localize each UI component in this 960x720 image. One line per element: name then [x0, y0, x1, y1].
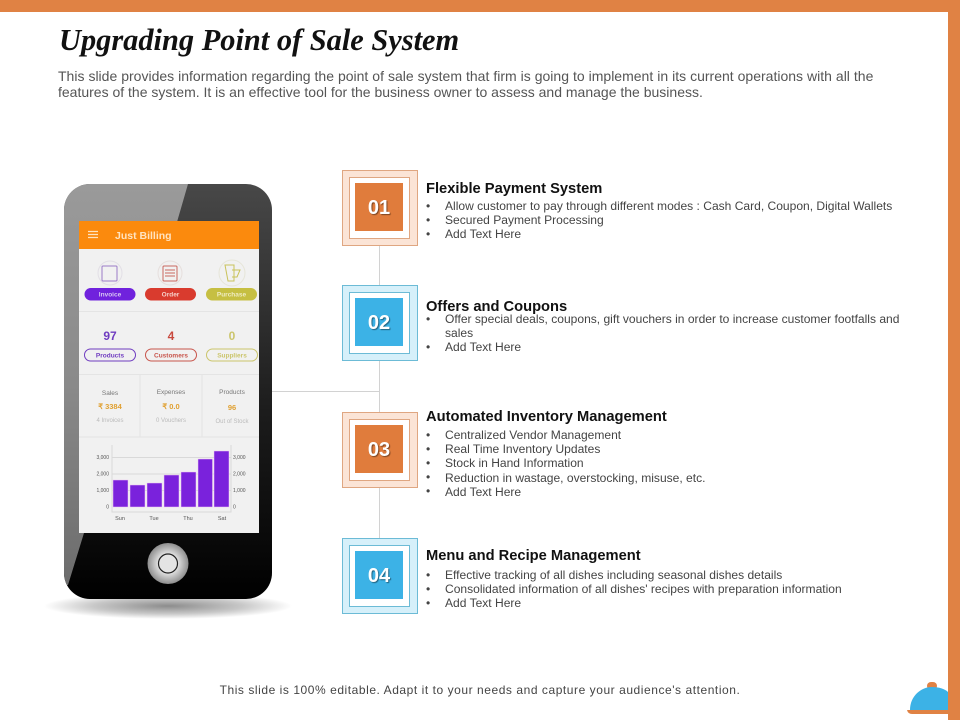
list: flexible payment: Secured Payment Processing — [445, 213, 604, 227]
list: inventory: Reduction in wastage, overstocking, misuse, etc. — [445, 471, 705, 485]
number badge 02: 02 — [368, 312, 390, 334]
intro text: This slide provides information regarding the point of sale system that firm is going to implement in its current operations with all the — [58, 68, 873, 84]
list: inventory: Real Time Inventory Updates — [445, 442, 600, 456]
list: offers: • — [426, 340, 430, 354]
bar chart: Thu — [183, 516, 193, 522]
list: offers: sales — [445, 326, 473, 340]
phone screen: 4 Invoices — [96, 418, 124, 424]
phone screen: 97 — [103, 329, 117, 343]
bar chart: 0 — [233, 504, 236, 510]
icon: serving cloche — [907, 682, 948, 714]
list: inventory: Stock in Hand Information — [445, 456, 584, 470]
bar chart — [96, 445, 246, 522]
phone screen: Products — [96, 352, 124, 360]
phone screen: Out of Stock — [215, 419, 250, 425]
list: inventory: Centralized Vendor Management — [445, 428, 621, 442]
bar chart: 2,000 — [96, 472, 109, 478]
list: offers: • — [426, 312, 430, 326]
bar chart: Sun — [115, 516, 125, 522]
list: menu: Add Text Here — [445, 596, 521, 610]
bar chart: 0 — [106, 504, 109, 510]
phone screen: Customers — [154, 352, 188, 360]
phone screen: Order — [162, 292, 180, 298]
list: menu: Effective tracking of all dishes including seasonal dishes details — [445, 568, 782, 582]
phone screen: Expenses — [157, 389, 186, 396]
number badge 01: 01 — [368, 197, 390, 219]
phone body — [64, 184, 272, 599]
phone screen: 0 Vouchers — [156, 418, 186, 424]
home button — [148, 543, 188, 584]
top orange band — [0, 0, 960, 12]
bar chart: 2,000 — [233, 472, 246, 478]
phone screen: ₹ 0.0 — [162, 402, 180, 411]
phone screen — [79, 221, 259, 533]
list: flexible payment — [426, 199, 892, 241]
list: menu: • — [426, 568, 430, 582]
list: flexible payment: • — [426, 227, 430, 241]
heading: menu: Menu and Recipe Management — [426, 548, 641, 564]
footer note: This slide is 100% editable. Adapt it to your needs and capture your audience's attention. — [220, 683, 740, 697]
list: inventory: • — [426, 442, 430, 456]
bar chart: 3,000 — [233, 455, 246, 461]
list: flexible payment: • — [426, 199, 430, 213]
list: offers: Add Text Here — [445, 340, 521, 354]
phone screen: Invoice — [99, 292, 122, 298]
bar chart: 1,000 — [96, 488, 109, 494]
list: flexible payment: Add Text Here — [445, 227, 521, 241]
phone illustration — [52, 184, 284, 618]
heading: inventory: Automated Inventory Management — [426, 409, 667, 425]
right orange band — [948, 0, 960, 720]
list: inventory — [426, 428, 705, 499]
list: inventory: Add Text Here — [445, 485, 521, 499]
list: inventory: • — [426, 484, 430, 498]
intro text: features of the system. It is an effective tool for the business owner to assess and manage the business. — [58, 84, 703, 100]
number badge 02 — [342, 285, 418, 361]
list: offers — [426, 312, 899, 354]
phone screen: Products — [219, 389, 246, 396]
number badge 01 — [342, 170, 418, 246]
phone screen: Sales — [102, 390, 119, 397]
phone screen: Suppliers — [217, 352, 247, 360]
heading: flexible payment: Flexible Payment System — [426, 181, 602, 197]
list: menu: • — [426, 582, 430, 596]
phone screen: Purchase — [217, 292, 247, 298]
list: menu: Consolidated information of all dishes' recipes with preparation information — [445, 582, 842, 596]
list: inventory: • — [426, 456, 430, 470]
bar chart: Sat — [218, 516, 227, 522]
bar chart: 1,000 — [233, 488, 246, 494]
title: Upgrading Point of Sale System — [59, 23, 459, 57]
list: inventory: • — [426, 470, 430, 484]
number badge 04: 04 — [368, 565, 390, 587]
number badge 04 — [342, 538, 418, 614]
number badge 03: 03 — [368, 439, 390, 461]
bar chart: Tue — [149, 516, 159, 522]
phone screen: 96 — [228, 403, 236, 412]
list: menu — [426, 568, 842, 610]
phone screen: ₹ 3384 — [98, 402, 123, 411]
phone shadow — [44, 593, 292, 619]
list: offers: Offer special deals, coupons, gift vouchers in order to increase customer footfalls and — [445, 312, 899, 326]
bar chart: 3,000 — [96, 455, 109, 461]
phone screen: Just Billing — [115, 230, 172, 242]
list: inventory: • — [426, 428, 430, 442]
list: flexible payment: Allow customer to pay through different modes : Cash Card, Coupon, Digital Wallets — [445, 199, 892, 213]
heading: offers: Offers and Coupons — [426, 299, 567, 315]
list: menu: • — [426, 596, 430, 610]
intro text — [58, 68, 873, 100]
phone screen: 4 — [168, 329, 175, 343]
phone screen: 0 — [229, 329, 236, 343]
number badge 03 — [342, 412, 418, 488]
list: flexible payment: • — [426, 213, 430, 227]
